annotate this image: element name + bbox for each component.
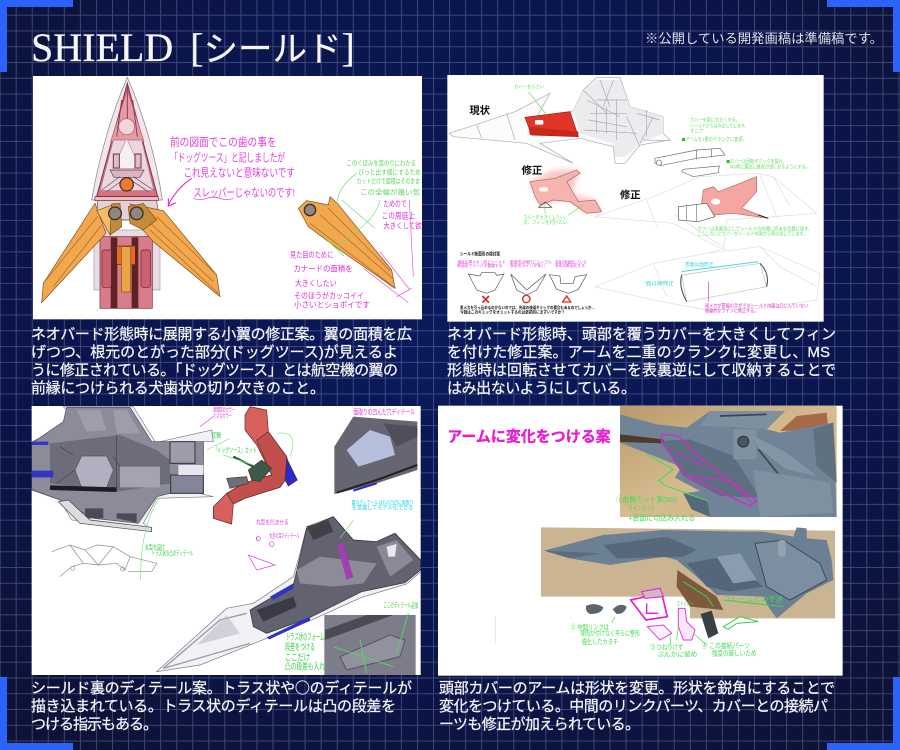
magenta callouts: 面取りの凹んだ穴ディテール: [353, 408, 415, 417]
cyan callout: を意識してモデル化できる: [352, 503, 413, 511]
bottom annotation text: [646, 261, 808, 314]
parts notes: ぶんかに留め: [657, 651, 698, 659]
sketch: truss outline: [52, 545, 157, 577]
green annotations: [320, 159, 421, 256]
orange wings: [42, 203, 220, 303]
pink annotations: 大きくして欲: [383, 221, 422, 231]
green annotations: アームを2重のクランクに変更。: [685, 136, 747, 143]
caption: wing revision: げつつ、根元のとがった部分(ドッグツース)が見えるよ: [31, 344, 398, 361]
shield section comparison: 今回はこのギミックをオミットするのは最初的にまずいですか？: [460, 309, 565, 315]
magenta callouts: [200, 406, 415, 570]
caption: arm revision: [439, 680, 835, 733]
red cover: [525, 112, 578, 137]
green callouts: 段差をつける: [285, 641, 315, 652]
bottom annotation text: 面は線修正: [646, 280, 674, 287]
pink handwritten note: [168, 135, 295, 206]
parts notes: フレームとの干渉: [723, 595, 784, 604]
upper photo note: [616, 495, 695, 523]
top-right inset: [334, 417, 417, 494]
caption: shield underside: [31, 677, 412, 733]
upper photo note: ①前腕カット案(MS): [616, 495, 678, 504]
green callouts: 切断: [212, 430, 222, 439]
shield section comparison: 断面形でインパネ整備する: [457, 262, 502, 268]
upper photo note: +表面に切込み入れる: [628, 514, 695, 523]
green callouts: 「ドッグツース」カット: [213, 446, 257, 455]
upper left assembly: [32, 407, 213, 532]
pink annotations: カナードの面積を: [293, 264, 353, 274]
pink annotations: [290, 200, 422, 309]
panel: shield underside detail: [32, 406, 421, 675]
shield section comparison: 黒メカを引っ込めるのかないのでは、先端の後端ギミックの都合もあるのでしょうか…: [460, 304, 595, 310]
shield outer shape: [92, 77, 162, 235]
shield section comparison: 多めのラインが多い: [510, 262, 545, 268]
shield section comparison: 多めの断面化する: [555, 262, 585, 268]
green callouts: トラス状の凸のディテール: [152, 548, 194, 557]
shield section comparison: シールド断面形の検討案: [460, 251, 501, 258]
parts notes: 強度の厳しいため: [712, 648, 757, 657]
panel: arm revision photos: [438, 406, 843, 676]
caption: wing revision: [31, 326, 412, 397]
caption: shield underside: シールド裏のディテール案。トラス状や○のディテールが: [31, 677, 412, 698]
revised sketch with fin: [595, 173, 817, 250]
lower photo: [541, 527, 835, 618]
pink annotations: 大きくしたい: [295, 278, 337, 288]
bottom annotation text: 表面は面修正: [685, 261, 713, 268]
green annotations: カバーを更に大きくする。: [690, 117, 740, 124]
cyan callout: [352, 498, 413, 511]
current state sketch: [449, 77, 670, 163]
green annotations: シールドからはみ出してします。: [690, 122, 748, 129]
parts notes: [571, 595, 784, 659]
bottom-right inset: [324, 613, 416, 675]
bottom annotation text: 黒メカが貫線の手ができシールド内面は凸じんでいない: [705, 302, 808, 309]
green annotations: カットだけで面積はそのまま: [357, 176, 420, 185]
parts notes: ③ ひねりけず: [650, 642, 684, 651]
green annotations: この全幅が幾い気: [360, 188, 420, 197]
pink handwritten note: 前の図面でこの歯の事を: [170, 135, 277, 149]
caption: wing revision: 前縁につけられる犬歯状の切り欠きのこと。: [31, 380, 325, 397]
green annotations: MS時に露出し裏表が逆になるようにする。: [730, 163, 810, 170]
green annotations: 又、フィンを付けたい。: [523, 219, 572, 226]
green annotations: カバーを小さい: [514, 84, 544, 91]
caption: head cover revision: はみ出ないようにしている。: [447, 380, 636, 397]
caption: head cover revision: [447, 326, 836, 397]
green annotations: カバーは表裏逆にしてシールドの内側に収まる位置に収す。: [697, 226, 812, 233]
pink annotations: そのほうがカッコイイ: [294, 290, 364, 300]
magenta callouts: 丸型を凹ませる: [256, 519, 289, 527]
label: revision 1: 修正: [522, 164, 542, 177]
shield section comparison: 断面形は現行にシンプル: [510, 258, 552, 264]
upper photo: [620, 406, 837, 517]
arm parts sketch: [655, 148, 725, 177]
pink annotations: 見た目のために: [290, 250, 333, 259]
label: revision 2: 修正: [620, 189, 641, 202]
cyan callout: 裏のディテールは丸の凸凹に面取り: [352, 498, 413, 506]
note: ※公開している開発画稿は準備稿です。: [645, 31, 883, 46]
caption: head cover revision: を付けた修正案。アームを二重のクランクに変更し、MS: [447, 344, 830, 361]
parts notes: ② 中間リンクは: [571, 622, 609, 631]
caption: wing revision: ネオバード形態時に展開する小翼の修正案。翼の面積を広: [31, 326, 412, 343]
green annotations: カバーを大きくしたい。: [523, 214, 568, 221]
pink annotations: ためので: [383, 200, 407, 209]
magenta callouts: 断面図のカラー: [213, 406, 235, 414]
panel: wing revision drawing: [33, 76, 422, 319]
upper photo note: ラインカット: [628, 504, 655, 513]
green annotations: カバーは回転ギミックを設け、: [730, 158, 787, 165]
label: current: 現状: [469, 104, 491, 117]
parts notes: ④ この接続パーツ: [702, 641, 750, 650]
green annotations: こうしないとカバーがシールド外側から飛び出してします。: [697, 231, 807, 238]
heading: arm change plan: アームに変化をつける案: [447, 427, 611, 445]
pink handwritten note: スレッパーじゃないのです!: [193, 187, 295, 200]
green callouts: 凸の段差も入れ: [285, 660, 325, 671]
small wing detail: [298, 197, 395, 288]
separate parts: [495, 588, 758, 643]
green annotations: びっと出す様にするため: [358, 167, 421, 176]
green callouts: ここだけ: [285, 653, 310, 663]
caption: arm revision: ーツも修正が加えられている。: [439, 716, 640, 733]
caption: shield underside: 描き込まれている。トラス状のディテールは凸の段差を: [31, 697, 396, 715]
caption: head cover revision: 形態時は回転させてカバーを表裏逆にして収納することで: [447, 362, 836, 379]
lower outline sketch: [595, 247, 820, 310]
shield section comparison: 全面の断面化している: [555, 258, 587, 264]
caption: wing revision: うに修正されている。「ドッグツース」とは航空機の翼の: [31, 362, 398, 379]
lower body: [94, 230, 160, 308]
green annotations: このくぼみを嵩のりにわかる: [347, 159, 416, 168]
green callouts: ここのディテール追加: [383, 600, 419, 609]
magenta callouts: 丸型の深さディテール: [269, 532, 299, 540]
green callouts: トラス状のフォーム: [286, 631, 324, 642]
green annotations: すこさ: [690, 128, 703, 135]
bottom annotation text: 複線的なラインに修正する。: [705, 307, 758, 314]
caption: arm revision: 頭部カバーのアームは形状を変更。形状を鋭角にすることで: [439, 680, 835, 697]
pink annotations: この周庭上: [382, 210, 415, 220]
revised cover sketch: [530, 170, 602, 213]
panel: head cover revision drawing: [447, 75, 824, 322]
pink annotations: 小さいとショボイです: [294, 300, 370, 309]
caption: shield underside: つける指示もある。: [31, 716, 158, 733]
pink handwritten note: 「ドッグツース」と記しましたが: [170, 150, 285, 164]
shield section comparison: 現状の黒メカ・同じシールド: [457, 258, 506, 264]
caption: head cover revision: ネオバード形態時、頭部を覆うカバーを大きくしてフィン: [447, 326, 836, 343]
parts notes: 強化したカタチ: [582, 637, 619, 646]
title: SHIELD [シールド]: [31, 25, 355, 70]
parts notes: ストッパー: [677, 600, 693, 608]
caption: arm revision: 変化をつけている。中間のリンクパーツ、カバーとの接続パ: [439, 698, 828, 715]
pink handwritten note: これ見えないと意味ないです: [183, 167, 295, 180]
lower right assembly: [157, 517, 421, 672]
magenta callouts: 小さなカラー: [213, 412, 232, 420]
green callouts: 丸型を設け: [145, 542, 165, 551]
red arm: [213, 407, 297, 524]
green callouts: [141, 430, 419, 671]
shield section comparison: [457, 251, 595, 315]
parts notes: 薄肉が付けなく平らに整形: [580, 628, 640, 637]
green annotations: [514, 84, 812, 238]
